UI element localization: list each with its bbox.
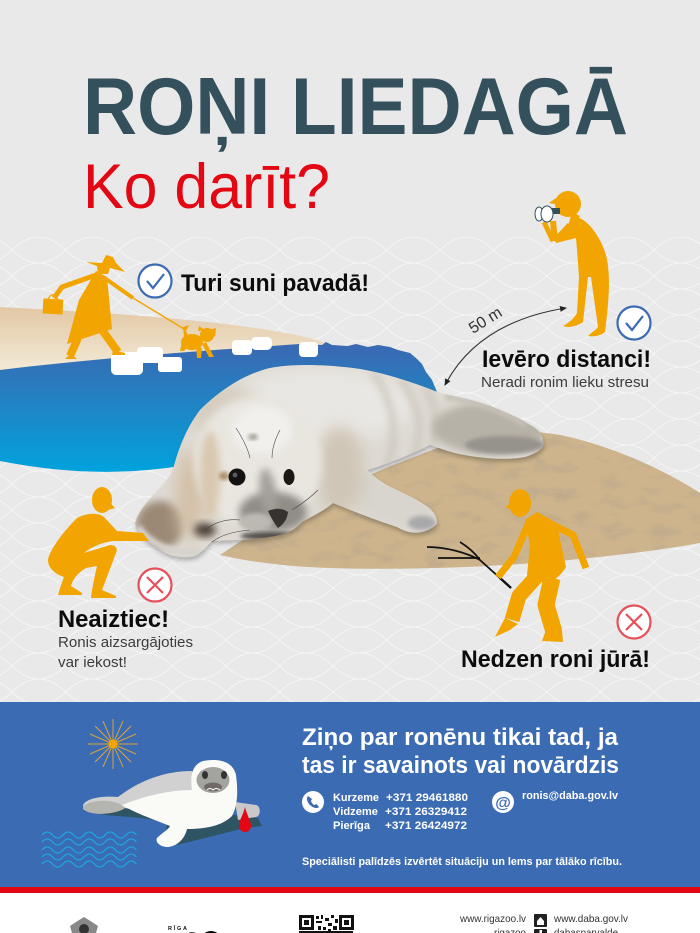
panel: footer (0, 893, 700, 933)
blood drop (239, 807, 251, 832)
distance arrow (445, 304, 566, 385)
heading: report the seal: tas ir savainots vai novārdzis (302, 752, 619, 779)
label: do not chase the seal into the sea: Nedzen roni jūrā! (461, 646, 650, 673)
icon: sun (88, 719, 138, 769)
subtitle: Ko darīt? (83, 152, 330, 222)
phone numbers: +371 26424972 (385, 820, 467, 832)
ice floes (111, 337, 318, 375)
icon: person with a branch (427, 489, 586, 642)
phone numbers: Pierīga (333, 820, 371, 832)
check badge: keep distance (618, 306, 650, 340)
seal eyes and nose (205, 428, 318, 542)
dog (180, 325, 216, 358)
note: seal may bite (58, 635, 193, 671)
icon: phone (302, 791, 324, 813)
label: keep distance: Ievēro distanci! (482, 346, 651, 373)
cross badge: do not touch (138, 568, 172, 602)
phone numbers: +371 26329412 (385, 806, 467, 818)
beach in the background (0, 307, 335, 372)
title: ROŅI LIEDAGĀ (83, 62, 628, 152)
icon: email: @ (495, 795, 511, 812)
icon: crouching person reaching out (48, 487, 149, 598)
label: keep the dog leashed: Turi suni pavadā! (181, 270, 369, 297)
footer links: nature agency (553, 913, 629, 933)
heading: report the seal (302, 724, 619, 779)
icon: email (492, 791, 514, 813)
note: specialists will assess: Speciālisti palīdzēs izvērtēt situāciju un lems par tālāko rīcību. (302, 856, 622, 868)
cross badge: do not chase (618, 606, 650, 638)
background panel with wave pattern (0, 0, 700, 702)
panel: contact band (0, 702, 700, 893)
icon: sea waves (42, 832, 136, 867)
note: seal may bite: var iekost! (58, 655, 127, 671)
heading: report the seal: Ziņo par ronēnu tikai tad, ja (302, 724, 619, 751)
seal pup photo illustration (130, 360, 550, 565)
note: seal may bite: Ronis aizsargājoties (58, 635, 193, 651)
binoculars (535, 206, 560, 222)
icon: wounded seal illustration (83, 760, 262, 847)
QR code (299, 915, 354, 933)
sea (0, 342, 437, 472)
check badge: dog on leash (138, 264, 172, 298)
phone numbers: Kurzeme (333, 792, 379, 804)
footer links: Riga zoo: www.rigazoo.lv (459, 913, 527, 925)
label: do not touch: Neaiztiec! (58, 606, 169, 633)
logo: crest (70, 917, 98, 933)
logo: Riga zoo: RĪGA (168, 925, 187, 932)
note: do not stress the seal: Neradi ronim lieku stresu (481, 375, 649, 391)
footer icons (534, 914, 547, 933)
icon: woman walking a dog on a leash (43, 255, 216, 359)
footer links: Riga zoo (459, 913, 527, 933)
icon: person watching through binoculars (535, 191, 609, 336)
distance label: 50 m (466, 304, 505, 337)
email address: ronis@daba.gov.lv (522, 790, 619, 802)
phone numbers (333, 792, 468, 832)
footer links: nature agency: www.daba.gov.lv (553, 913, 629, 925)
phone numbers: +371 29461880 (386, 792, 468, 804)
sand (220, 431, 700, 569)
phone numbers: Vidzeme (333, 806, 378, 818)
logo: Riga zoo (168, 925, 222, 933)
